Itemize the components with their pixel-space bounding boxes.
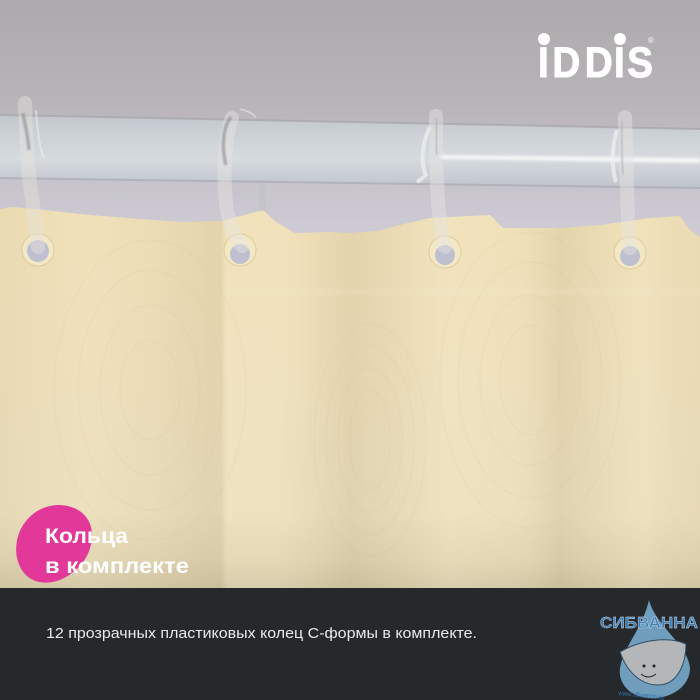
curtain ring 2 [223, 109, 256, 266]
background wall [0, 0, 700, 240]
curtain fabric [0, 207, 700, 590]
watermark logo: Сибванна: СИБВАННА [600, 615, 698, 632]
curtain rod [0, 114, 700, 189]
logo: IDDIS: ® [648, 36, 654, 45]
hook fragment [259, 186, 265, 208]
heading: Кольца в комплекте: Кольца [45, 525, 128, 548]
curtain ring 4 [613, 117, 646, 269]
heading: Кольца в комплекте [45, 525, 189, 578]
pink blob badge [16, 505, 92, 583]
heading: Кольца в комплекте: в комплекте [45, 555, 189, 578]
watermark logo: Сибванна [600, 600, 698, 700]
curtain ring 1 [22, 103, 54, 266]
hem line [223, 288, 700, 295]
description text: 12 прозрачных пластиковых колец С-формы в комплекте. [46, 626, 477, 642]
curtain ring 3 [417, 116, 461, 268]
logo: IDDIS: IDDIS [538, 38, 653, 86]
bottom band [0, 588, 700, 700]
swirl pattern [54, 232, 620, 556]
